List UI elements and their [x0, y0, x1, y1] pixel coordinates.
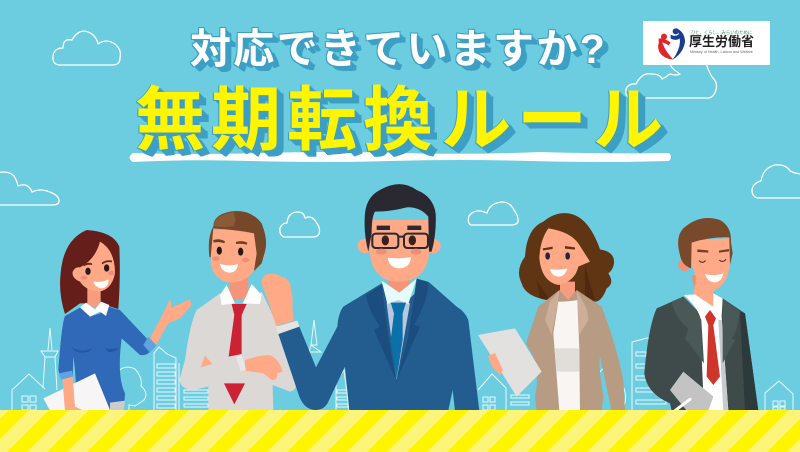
city outline [12, 320, 793, 410]
clouds [0, 31, 800, 237]
house left [12, 374, 45, 410]
cloud: small centre left [280, 212, 320, 237]
striped footer band [0, 410, 800, 452]
main title: 無期転換ルール [135, 81, 669, 159]
logo caption english: Ministry of Health, Labour and Welfare [690, 50, 753, 54]
person: man left [179, 211, 296, 411]
building right [632, 338, 675, 410]
cloud: under logo [626, 63, 716, 98]
cloud: far left [0, 172, 59, 205]
tree left [117, 367, 146, 410]
cloud: top left [53, 31, 120, 65]
tree right [598, 368, 626, 410]
house right [765, 381, 793, 410]
person: central man [262, 184, 479, 411]
house centre [478, 374, 529, 410]
person: man right [644, 218, 758, 411]
person: woman left [43, 230, 192, 411]
building centre [336, 370, 349, 410]
logo panel [643, 21, 770, 65]
subtitle: 対応できていますか? [190, 26, 607, 72]
person: woman right [478, 213, 625, 411]
cloud: small centre right [468, 202, 518, 225]
tower [41, 328, 58, 390]
tower centre [309, 320, 321, 352]
logo caption japanese: ひと、くらし、みらいのために [691, 30, 752, 35]
logo name: 厚生労働省 [689, 34, 754, 49]
building left [154, 347, 208, 410]
cloud: far right [752, 165, 800, 198]
